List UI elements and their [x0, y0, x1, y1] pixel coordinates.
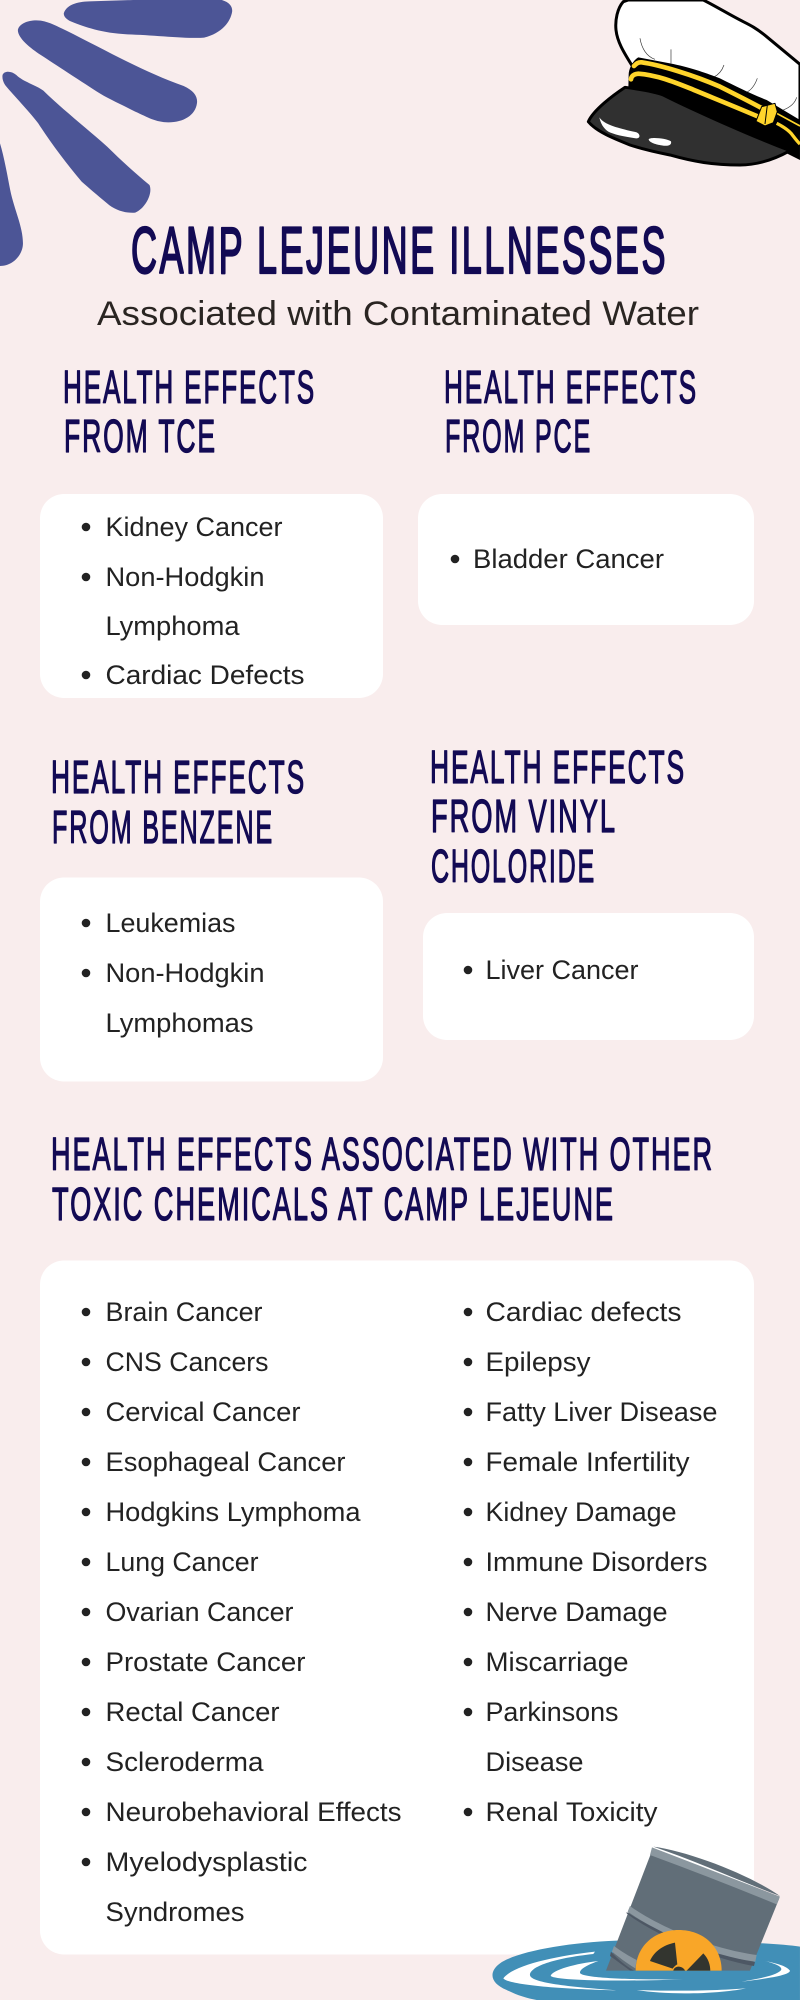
- list: other effects, right column: Kidney Damage: [486, 1497, 676, 1527]
- panel: PCE effects: [418, 494, 754, 625]
- list: other effects, left column: Syndromes: [106, 1897, 244, 1927]
- subtitle: Associated with Contaminated Water: [97, 295, 699, 333]
- barrel top lid: [653, 1847, 780, 1896]
- list: other effects, left column: Brain Cancer: [106, 1297, 263, 1327]
- heading: TCE: FROM TCE: [64, 410, 217, 462]
- list: TCE: Kidney Cancer: [106, 512, 283, 542]
- decorative blue leaf shapes: [0, 0, 232, 266]
- list: other effects, right column: [464, 1297, 718, 1827]
- list: other effects, left column: Hodgkins Lymphoma: [106, 1497, 361, 1527]
- list: PCE: Bladder Cancer: [473, 544, 664, 574]
- panel: benzene effects: [40, 878, 383, 1082]
- heading: vinyl chloride: [430, 741, 686, 892]
- list: TCE: Cardiac Defects: [106, 660, 304, 690]
- list: other effects, left column: Cervical Cancer: [106, 1397, 301, 1427]
- water pool: [492, 1940, 800, 2000]
- list: other effects, right column: Disease: [486, 1747, 584, 1777]
- heading: TCE: [63, 361, 316, 462]
- icon: captain hat: [588, 0, 800, 165]
- list: other effects, right column: Nerve Damage: [486, 1597, 668, 1627]
- panel: vinyl chloride effects: [423, 913, 754, 1040]
- list: other effects, right column: Parkinsons: [486, 1697, 618, 1727]
- list: other effects, left column: Lung Cancer: [106, 1547, 259, 1577]
- heading: other toxic chemicals: [51, 1128, 714, 1230]
- list: other effects, left column: CNS Cancers: [106, 1347, 268, 1377]
- list: other effects, left column: Prostate Cancer: [106, 1647, 306, 1677]
- heading: PCE: FROM PCE: [445, 410, 592, 462]
- heading: vinyl chloride: CHOLORIDE: [431, 840, 596, 892]
- list: other effects, left column: Myelodysplastic: [106, 1847, 308, 1877]
- list: other effects, left column: Neurobehavioral Effects: [106, 1797, 402, 1827]
- heading: benzene: HEALTH EFFECTS: [51, 751, 306, 803]
- list: other effects, right column: Epilepsy: [486, 1347, 591, 1377]
- barrel middle ring: [627, 1912, 755, 1966]
- list: other effects, right column: Female Infertility: [486, 1447, 690, 1477]
- list: other effects, left column: Ovarian Cancer: [106, 1597, 294, 1627]
- list: TCE: Lymphoma: [106, 611, 240, 641]
- list: TCE: [82, 512, 304, 690]
- heading: benzene: [51, 751, 306, 853]
- list: other effects, left column: Rectal Cancer: [106, 1697, 280, 1727]
- heading: PCE: [444, 361, 698, 462]
- heading: benzene: FROM BENZENE: [52, 801, 274, 853]
- list: other effects, right column: Renal Toxicity: [486, 1797, 658, 1827]
- barrel top rim: [650, 1847, 780, 1904]
- list: benzene: Non-Hodgkin: [106, 958, 264, 988]
- list: TCE: Non-Hodgkin: [106, 562, 264, 592]
- list: vinyl chloride: Liver Cancer: [486, 955, 639, 985]
- list: other effects, left column: [82, 1297, 401, 1927]
- panel: other effects: [40, 1260, 754, 1954]
- icon: toxic barrel in water: [492, 1847, 800, 2000]
- list: other effects, left column: Scleroderma: [106, 1747, 264, 1777]
- barrel lower ring: [610, 1952, 634, 1971]
- water ripples: [503, 1952, 790, 1993]
- heading: TCE: HEALTH EFFECTS: [63, 361, 316, 413]
- list: other effects, right column: Cardiac defects: [486, 1297, 682, 1327]
- panel: TCE effects: [40, 494, 383, 698]
- list: benzene: Leukemias: [106, 908, 236, 938]
- list: other effects, right column: Miscarriage: [486, 1647, 628, 1677]
- heading: vinyl chloride: FROM VINYL: [431, 790, 617, 842]
- list: other effects, left column: Esophageal Cancer: [106, 1447, 346, 1477]
- barrel body: [606, 1853, 779, 1971]
- radiation symbol: [636, 1930, 722, 1971]
- list: other effects, right column: Immune Disorders: [486, 1547, 708, 1577]
- list: other effects, right column: Fatty Liver Disease: [486, 1397, 718, 1427]
- list: benzene: Lymphomas: [106, 1008, 254, 1038]
- list: benzene: [82, 908, 264, 1038]
